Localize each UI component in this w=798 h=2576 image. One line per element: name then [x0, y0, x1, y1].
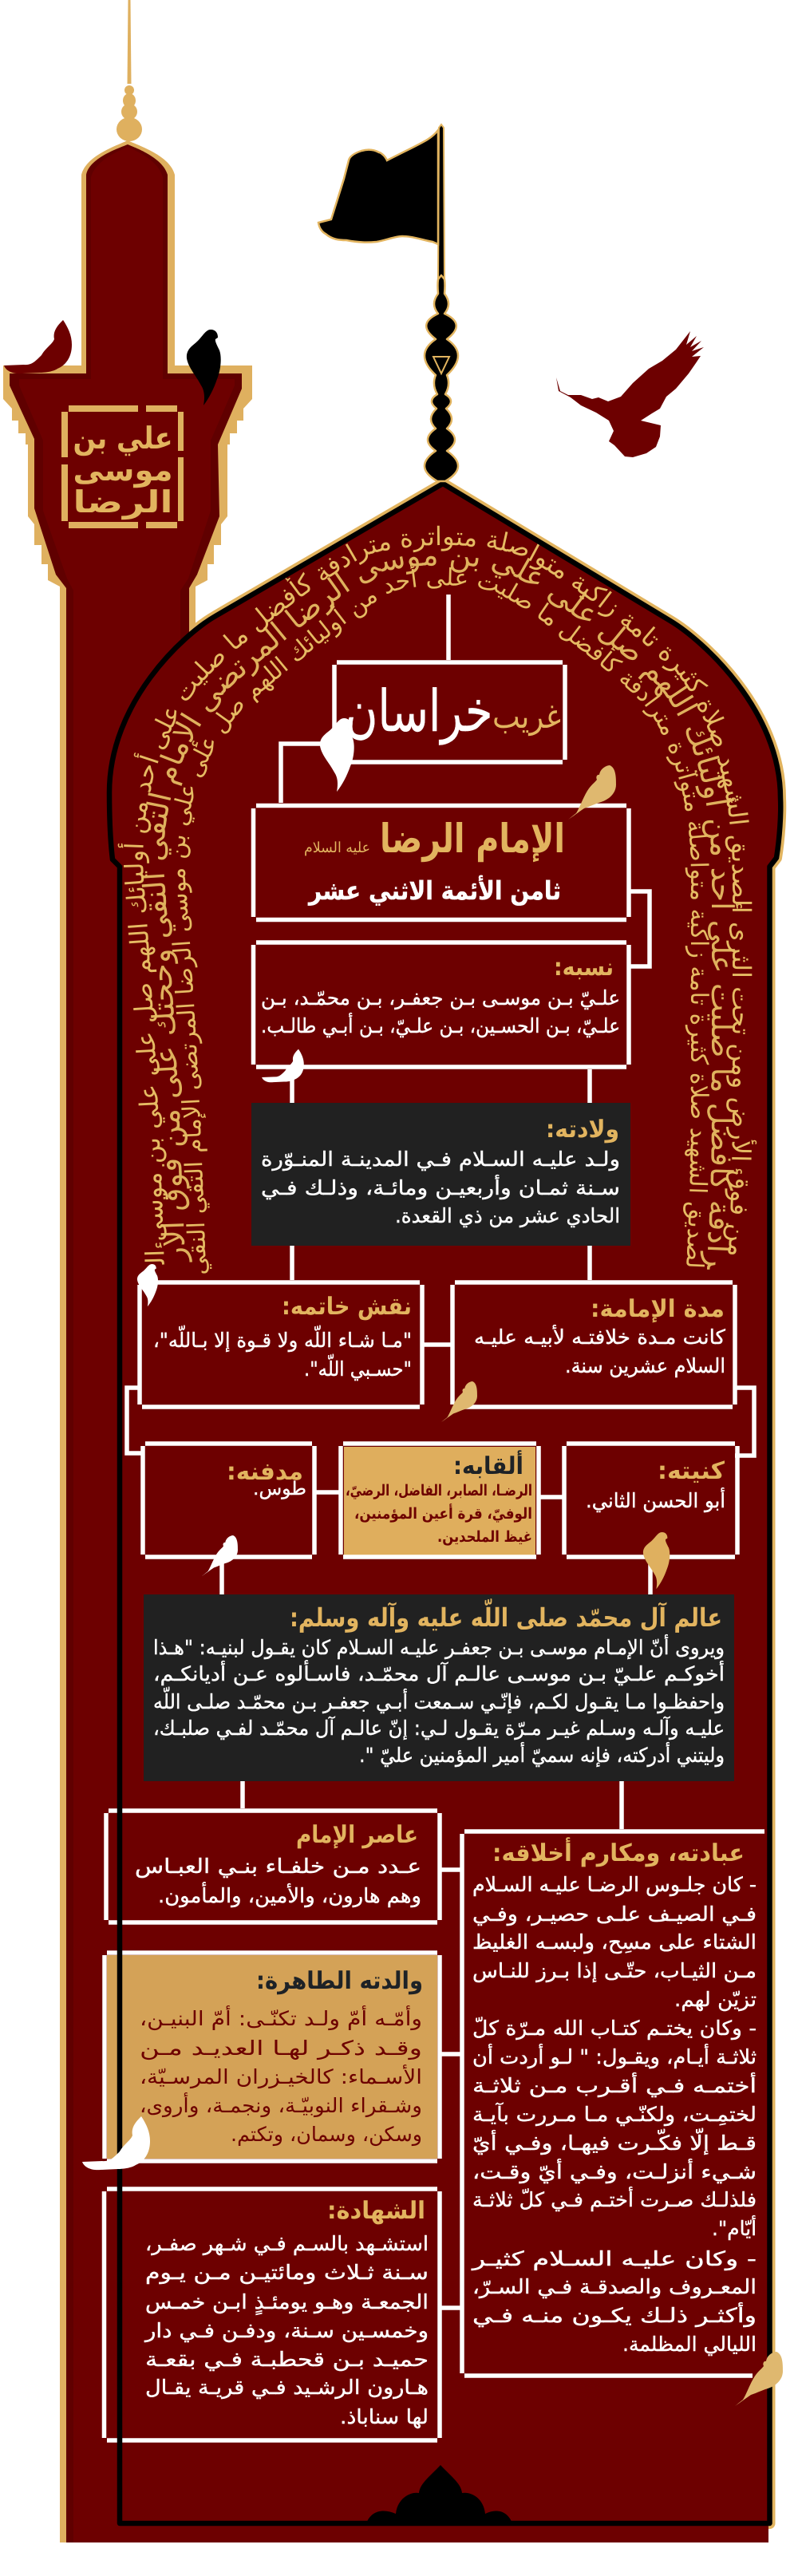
- heading: والدته الطاهرة:: [256, 1967, 423, 1995]
- frame: [104, 2189, 440, 2440]
- body text: - كان جلـوس الرضـا عليـه السـلام: [472, 1873, 757, 1897]
- frame: [254, 942, 629, 1067]
- bird: white at khorasan box: [320, 718, 354, 792]
- body text: وهم هارون، والأمين، والمأمون.: [158, 1882, 421, 1908]
- body text: ولـد عليـه السـلام فـي المدينـة المنـوّرة: [261, 1148, 620, 1171]
- dome gold outline: [109, 484, 780, 2523]
- bird: gold on worship box: [735, 2352, 783, 2406]
- heading: مدة الإمامة:: [591, 1295, 725, 1323]
- body text: [144, 2232, 429, 2429]
- panel: gharib khorasan: [334, 662, 565, 762]
- heading: كنيته:: [658, 1457, 725, 1485]
- body text: أختمـه فـي أقـرب مـن ثلاثـة: [472, 2072, 757, 2098]
- kufic text: موسى: [73, 452, 172, 488]
- frame: [564, 1444, 737, 1557]
- panel: ring inscription: [140, 1282, 422, 1407]
- kufic text: [73, 421, 172, 520]
- body text: [346, 1482, 532, 1546]
- body text: علـيّ، بـن الحسـين، بـن علـيّ، بـن أبـي طالـب.: [261, 1013, 620, 1038]
- panel: lineage: [254, 942, 629, 1067]
- body text: "مـا شـاء اللّه ولا قـوة إلا بـاللّه"،: [153, 1326, 412, 1353]
- panel: birth: [251, 1103, 630, 1246]
- body text: وليتني أدركته، فإنه سميّ أمير المؤمنين عليّ ".: [359, 1742, 725, 1768]
- body text: الرضـا، الصابر، الفاضل، الرضيّ،: [346, 1482, 532, 1499]
- kufic name panel: [61, 405, 184, 528]
- panel: titles: [341, 1444, 539, 1557]
- frame: [143, 1444, 314, 1557]
- bird: gold on imamate box: [441, 1381, 477, 1422]
- frame: [105, 1953, 440, 2161]
- bird: white on burial box: [202, 1535, 238, 1576]
- body text: [470, 1873, 757, 2357]
- body text: الشتاء على مسِح، ولبسـه الغليظ: [472, 1930, 757, 1954]
- body text: أخوكـم علـيّ بـن موسـى عالـم آل محمّـد، فاسـألوه عـن أديانكـم،: [153, 1660, 725, 1686]
- panel: scholar of the family: [144, 1594, 734, 1781]
- body text: عليـه وآلـه وسـلم غيـر مـرّة يقـول لـي: إنّ عالـم آل محمّـد لفـي صلبـك،: [153, 1716, 725, 1740]
- body text: كانت مـدة خلافتـه لأبيـه عليـه: [474, 1325, 725, 1349]
- body text: تزيّن لهم.: [674, 1988, 757, 2012]
- body text: [474, 1325, 725, 1378]
- body text: وأمّـه أمّ ولـد تكنّـى: أمّ البنيـن،: [140, 2005, 422, 2031]
- body text: واحفظـوا مـا يقـول لكـم، فإنّـي سـمعت أبـي جعفـر بـن محمّـد صلـى اللّه: [153, 1687, 725, 1714]
- bird: red on minaret: [4, 320, 72, 373]
- frame: [462, 1831, 764, 2376]
- body text: قـط إلّا فكّـرت فيهـا، وفـي أيّ: [472, 2128, 757, 2155]
- body text: وخمسـين سـنة، ودفـن فـي دار: [144, 2319, 429, 2343]
- panel: kunya: [564, 1444, 737, 1557]
- heading: ألقابه:: [453, 1450, 523, 1480]
- frame: [334, 662, 565, 762]
- body text: سـنة ثـلاث ومائتيـن مـن يـوم: [145, 2261, 429, 2285]
- bird: white on ring box: [137, 1264, 158, 1306]
- minaret spire: [117, 0, 142, 141]
- heading gharib: غريب: [492, 697, 561, 737]
- frame: [140, 1282, 422, 1407]
- body text: مـن الثيـاب، حتّـى إذا بـرز للنـاس: [472, 1959, 757, 1983]
- frame: [106, 1811, 440, 1922]
- body text: شـيء أنزلـت، وفـي أيّ وقـت،: [472, 2159, 757, 2184]
- body text: طوس.: [253, 1479, 306, 1499]
- minaret gold outline: [3, 140, 252, 2542]
- bird: white on mother box: [82, 2116, 150, 2170]
- kufic text: الرضا: [73, 484, 172, 520]
- heading: ولادته:: [546, 1116, 619, 1144]
- body text: - وكان يختـم كتـاب الله مـرّة كلّ: [472, 2017, 757, 2041]
- body text: الليالي المظلمة.: [622, 2333, 757, 2357]
- connectors: [127, 595, 754, 2308]
- bird: black on minaret: [187, 330, 221, 405]
- body text: وأكثـر ذلـك يكـون منـه فـي: [472, 2302, 757, 2328]
- body text: [261, 986, 620, 1038]
- panel: martyrdom: [104, 2189, 440, 2440]
- calligraphy arch: [118, 525, 757, 1274]
- heading khorasan: خراسان: [345, 678, 493, 745]
- background: [144, 1594, 734, 1781]
- bird: white on lineage box: [262, 1049, 304, 1082]
- body text: وقـد ذكـر لهـا العديـد مـن: [140, 2037, 422, 2060]
- body text: "حسـبي اللّه".: [304, 1354, 412, 1381]
- honorific: عليه السلام: [304, 840, 370, 856]
- minaret: [3, 0, 252, 2542]
- finial inner lantern: [433, 357, 449, 373]
- panel: imamate period: [452, 1282, 735, 1407]
- heading: عاصر الإمام: [296, 1821, 418, 1849]
- body text: [261, 1148, 620, 1228]
- frame: [341, 1444, 539, 1557]
- panel: mother: [105, 1953, 440, 2161]
- panel: burial: [143, 1444, 314, 1557]
- body text: لختمِـت، ولكنّـي مـا مـررت بآيـة: [472, 2102, 757, 2127]
- panel: worship and character: [462, 1831, 764, 2376]
- black domes silhouette: [366, 2465, 512, 2523]
- black flag: [318, 130, 438, 244]
- body text: [153, 1634, 725, 1768]
- body text: هـارون الرشـيد فـي قريـة يقـال: [145, 2376, 429, 2400]
- subtitle: ثامن الأئمة الاثني عشر: [307, 875, 561, 906]
- body text: السلام عشرين سنة.: [565, 1354, 725, 1378]
- kufic frame: [61, 405, 184, 528]
- finial: [425, 275, 458, 481]
- body text: أيّام".: [712, 2215, 757, 2240]
- frame: [452, 1282, 735, 1407]
- bird: gold on imam box: [568, 765, 616, 820]
- minaret dark body: [10, 144, 242, 2542]
- body text: فـي الصيـف علـى حصيـر، وفـي: [472, 1902, 757, 1926]
- frame: [254, 806, 629, 919]
- eagle: [556, 331, 704, 457]
- body text: الحادي عشر من ذي القعدة.: [395, 1204, 620, 1228]
- body text: ثلاثـة أيـام، ويقـول: " لـو أردت أن: [472, 2044, 757, 2069]
- body text: - وكان عليـه السـلام كثيـر: [470, 2247, 757, 2271]
- kufic text: علي بن: [73, 421, 172, 456]
- body text: المعـروف والصدقـة فـي السـرّ،: [472, 2275, 757, 2299]
- body text: [153, 1326, 412, 1381]
- body text: أبو الحسن الثاني.: [586, 1488, 725, 1513]
- body text: [135, 1855, 421, 1908]
- body text: وشـقراء النوبيّـة، ونجمـة، وأروى،: [140, 2092, 422, 2118]
- background: [344, 1447, 535, 1555]
- bird: gold on kunya box: [643, 1532, 670, 1589]
- body text: حميـد بـن قحطبـة فـي بقعـة: [145, 2348, 429, 2372]
- body text: غيظ الملحدين.: [437, 1528, 532, 1546]
- shrine black outline: [109, 484, 780, 2523]
- body text: علـيّ بـن موسـى بـن جعفـر، بـن محمّـد، بـن: [261, 986, 620, 1010]
- heading: عبادته، ومكارم أخلاقه:: [492, 1837, 745, 1867]
- body text: عـدد مـن خلفـاء بنـي العبـاس: [135, 1855, 421, 1879]
- flag and finial: [318, 124, 458, 481]
- body text: [140, 2005, 422, 2147]
- heading: مدفنه:: [227, 1458, 303, 1486]
- body text: الوفيّ، قرة أعين المؤمنين،: [354, 1503, 532, 1523]
- minaret light body: [19, 147, 235, 2542]
- body text: لها سناباذ.: [340, 2405, 429, 2429]
- body text: استشـهد بالسـم فـي شـهر صفـر،: [145, 2232, 429, 2256]
- heading: نقش خاتمه:: [282, 1293, 412, 1321]
- body text: سـنة ثمـان وأربعيـن ومائـة، وذلـك فـي: [261, 1175, 620, 1200]
- background: [107, 1955, 437, 2159]
- bottom strip: [117, 2474, 768, 2542]
- heading: الشهادة:: [327, 2197, 425, 2225]
- body text: الأسـماء: كالخيـزران المرسـيّة،: [140, 2064, 422, 2089]
- body text: وسكن، وسمان، وتكتم.: [231, 2123, 422, 2147]
- body text: الجمعـة وهـو يومئـذٍ ابـن خمـس: [145, 2290, 429, 2315]
- shrine body fill: [109, 484, 780, 2523]
- imam name: الإمام الرضا: [380, 816, 565, 863]
- body text: ويروى أنّ الإمـام موسـى بـن جعفـر عليـه السـلام كان يقـول لبنيـه: "هـذا: [153, 1634, 725, 1660]
- panel: contemporaries: [106, 1811, 440, 1922]
- flag pole: [438, 124, 444, 279]
- heading: عالم آل محمّد صلى اللّه عليه وآله وسلم:: [290, 1598, 722, 1633]
- heading: نسبه:: [554, 954, 614, 982]
- body text: فلذلـك صـرت أختـم فـي كلّ ثلاثـة: [472, 2187, 757, 2212]
- background: [251, 1103, 630, 1246]
- panel: imam title: [254, 806, 629, 919]
